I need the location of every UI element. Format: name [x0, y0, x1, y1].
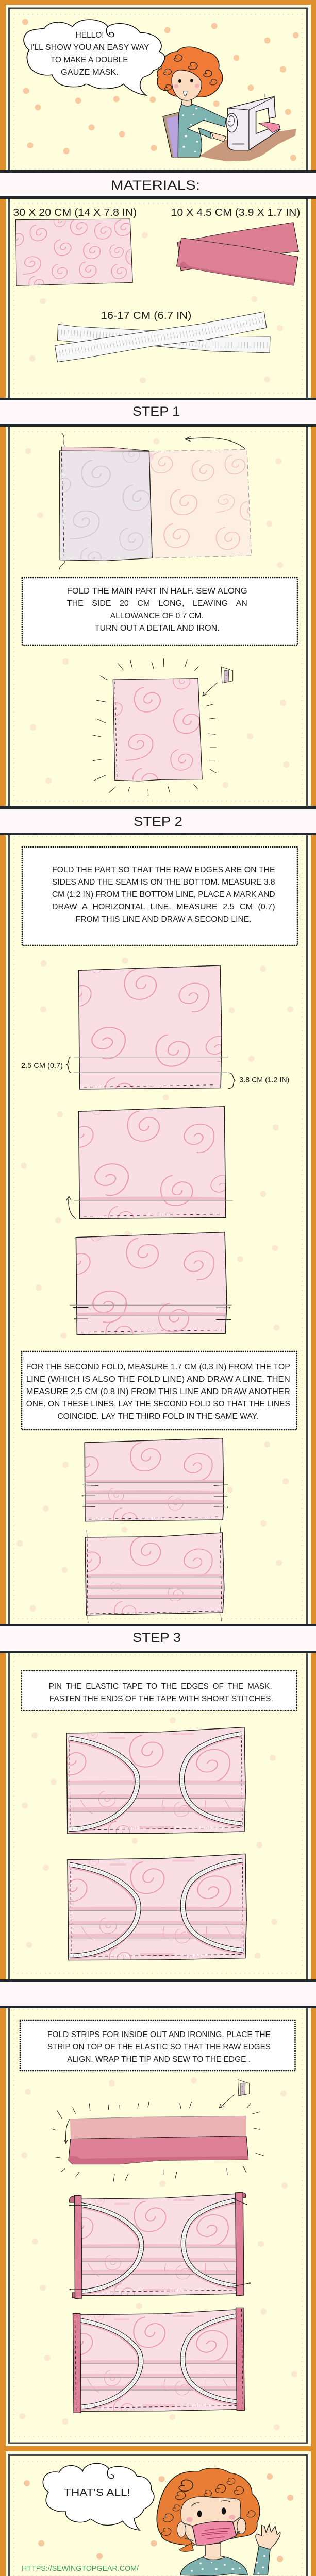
materials dots	[29, 232, 283, 383]
speech bubble: hello: GAUZE MASK.	[61, 68, 119, 77]
note: step 2 first fold instructions: DRAW A HORIZONTAL LINE. MEASURE 2.5 CM (0.7)	[52, 903, 275, 911]
measurement label: 2.5 cm: 2.5 CM (0.7)	[21, 1061, 63, 1070]
waving hand	[256, 2524, 280, 2549]
speech bubble: hello: TO MAKE A DOUBLE	[51, 56, 128, 64]
note: second fold instructions: FOR THE SECOND FOLD, MEASURE 1.7 CM (0.3 IN) FROM THE TOP	[26, 1363, 290, 1371]
curved fold arrow	[185, 436, 245, 449]
fold in half diagram	[51, 433, 260, 569]
note: second fold instructions: MEASURE 2.5 CM (0.8 IN) FROM THIS LINE AND DRAW ANOTHER	[26, 1387, 290, 1396]
three folds pinned diagram	[81, 1437, 228, 1522]
steam rays	[92, 658, 218, 796]
face	[177, 2497, 246, 2545]
speech bubble: hello	[24, 20, 165, 95]
first fold diagram	[66, 1106, 233, 1219]
icon: iron	[221, 667, 233, 683]
arrow from iron	[219, 2095, 234, 2108]
note: second fold instructions: ONE. ON THESE LINES, LAY THE SECOND FOLD SO THAT THE LINES	[26, 1400, 290, 1409]
ironed fabric diagram	[92, 658, 233, 796]
elastic tape strips	[55, 312, 270, 362]
strip section dots	[19, 2077, 297, 2430]
heading band: step 1: STEP 1	[132, 404, 180, 419]
note: elastic instructions: PIN THE ELASTIC TAPE TO THE EDGES OF THE MASK.	[49, 1682, 272, 1691]
background polka dots: closing panel	[24, 2473, 293, 2562]
note: elastic instructions	[22, 1671, 297, 1710]
note: step 1 instructions	[22, 578, 297, 645]
heading band: step 2	[0, 806, 316, 835]
teal sweater body	[178, 103, 226, 157]
note: strip instructions: FOLD STRIPS FOR INSIDE OUT AND IRONING. PLACE THE	[47, 2030, 271, 2039]
heading band: materials: MATERIALS:	[111, 178, 200, 193]
folded top layer peek	[61, 447, 149, 451]
pins	[69, 2198, 250, 2290]
note: step 2 first fold instructions: FROM THIS LINE AND DRAW A SECOND LINE.	[76, 915, 252, 924]
icon: iron	[238, 2080, 250, 2096]
illustration: woman wearing mask and waving	[157, 2468, 280, 2576]
rays	[51, 2102, 263, 2181]
mask with sewn elastic	[57, 1854, 247, 1969]
neck	[203, 2544, 225, 2560]
fabric with two measured lines	[65, 965, 236, 1090]
folded half with stitching	[51, 433, 152, 569]
chair	[163, 112, 178, 157]
measurement label: 3.8 cm: 3.8 CM (1.2 IN)	[239, 1076, 289, 1084]
speech bubble: that's all	[43, 2463, 154, 2530]
note: strip instructions	[20, 2020, 295, 2071]
hair curls	[161, 2478, 255, 2535]
ironed strip diagram	[51, 2080, 263, 2181]
note: step 1 instructions: TURN OUT A DETAIL AND IRON.	[95, 624, 220, 633]
heading band: blank	[0, 1979, 316, 2008]
step 2 dots	[16, 958, 293, 1723]
pins	[81, 1485, 228, 1507]
finished mask with sewn strips	[64, 2308, 244, 2419]
note: elastic instructions: FASTEN THE ENDS OF THE TAPE WITH SHORT STITCHES.	[49, 1694, 273, 1703]
illustration: woman at sewing machine	[157, 47, 296, 161]
pinned first fold diagram	[69, 1231, 232, 1335]
material label: elastic length: 16-17 CM (6.7 IN)	[101, 310, 192, 321]
heading band: materials	[0, 170, 316, 199]
sewing machine	[226, 94, 280, 150]
pins	[73, 1307, 231, 1320]
arrow from iron	[203, 683, 217, 696]
measurement braces	[66, 1057, 236, 1089]
note: step 2 first fold instructions	[22, 847, 297, 945]
heading band: step 3: STEP 3	[132, 1631, 181, 1645]
mask with pinned binding strips	[65, 2192, 250, 2303]
heading band: step 1	[0, 398, 316, 427]
fabric rectangle with swirl print	[15, 218, 133, 286]
note: second fold instructions	[22, 1351, 297, 1430]
hair	[157, 2468, 260, 2551]
sewing table	[199, 129, 296, 161]
heading band: step 2: STEP 2	[134, 815, 182, 829]
note: second fold instructions: LINE (WHICH IS ALSO THE FOLD LINE) AND DRAW A LINE. THEN	[26, 1375, 290, 1384]
note: step 2 first fold instructions: CM (1.2 IN) FROM THE BOTTOM LINE, PLACE A MARK AND	[52, 890, 275, 899]
step 1 lower dots	[30, 658, 289, 788]
speech bubble: hello: I'LL SHOW YOU AN EASY WAY	[30, 43, 149, 52]
mask with pinned elastic	[56, 1727, 246, 1842]
material label: main fabric size: 30 X 20 CM (14 X 7.8 IN)	[13, 207, 137, 218]
sweater	[180, 2546, 270, 2576]
note: step 1 instructions: THE SIDE 20 CM LONG, LEAVING AN	[67, 599, 247, 608]
website url: HTTPS://SEWINGTOPGEAR.COM/	[22, 2564, 139, 2573]
speech bubble: hello: HELLO!	[76, 31, 104, 40]
step 1 dots	[25, 438, 283, 568]
step 3 dots	[22, 1732, 277, 1959]
hair	[157, 47, 223, 97]
side strips	[70, 2192, 246, 2299]
note: step 1 instructions: ALLOWANCE OF 0.7 CM.	[110, 612, 204, 620]
note: step 2 first fold instructions: FOLD THE PART SO THAT THE RAW EDGES ARE ON THE	[52, 866, 275, 874]
heading band: step 3	[0, 1624, 316, 1653]
speech bubble: that's all: THAT'S ALL!	[64, 2487, 130, 2498]
unfolded fabric ghost	[149, 449, 260, 558]
note: step 2 first fold instructions: SIDES AND THE SEAM IS ON THE BOTTOM. MEASURE 3.8	[52, 878, 275, 887]
note: strip instructions: ALIGN. WRAP THE TIP AND SEW TO THE EDGE..	[67, 2055, 251, 2064]
note: step 1 instructions: FOLD THE MAIN PART IN HALF. SEW ALONG	[67, 587, 247, 596]
sewn pleats diagram	[74, 1523, 224, 1623]
note: strip instructions: STRIP ON TOP OF THE ELASTIC SO THAT THE RAW EDGES	[47, 2043, 271, 2052]
background polka dots: intro panel	[22, 19, 299, 161]
material label: strip size: 10 X 4.5 CM (3.9 X 1.7 IN)	[171, 207, 300, 218]
fold up arrow	[66, 1196, 76, 1219]
face	[172, 70, 202, 106]
pink binding strips	[177, 223, 298, 285]
note: second fold instructions: COINCIDE. LAY THE THIRD FOLD IN THE SAME WAY.	[57, 1412, 258, 1421]
pink face mask	[182, 2517, 241, 2545]
